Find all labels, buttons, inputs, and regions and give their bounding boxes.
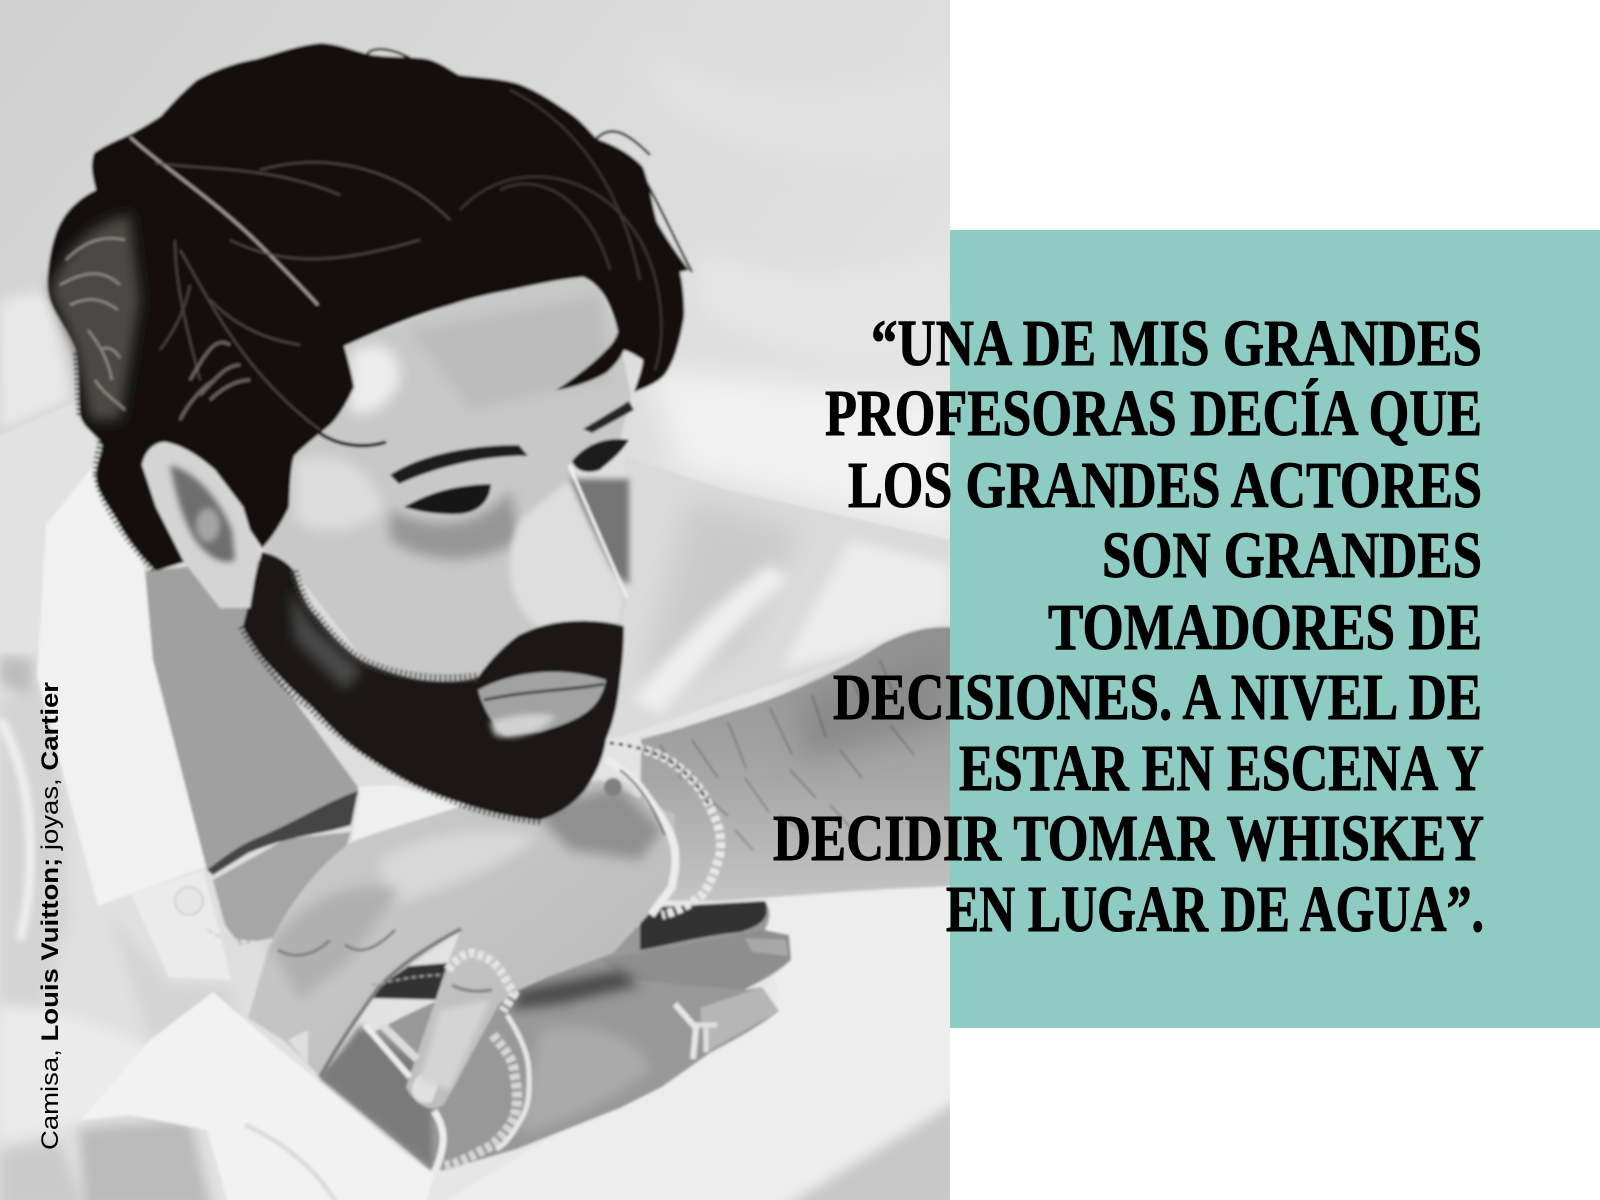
quote text: SON GRANDES <box>1102 519 1482 592</box>
quote text: TOMADORES DE <box>1048 591 1482 664</box>
jewellery: necklace <box>207 929 272 942</box>
table surface <box>430 886 960 1200</box>
teal quote panel <box>950 230 1600 1028</box>
beard <box>243 552 624 820</box>
jewellery: upper bracelets <box>604 743 721 915</box>
photo backdrop: water <box>0 0 960 1200</box>
hair <box>47 43 692 571</box>
jewellery: finger ring <box>448 953 514 1011</box>
quote text <box>773 307 1484 946</box>
lower hand <box>320 901 791 1170</box>
neck and chest <box>145 560 470 945</box>
shirt cuff <box>81 992 434 1200</box>
forearm with arm hair <box>640 627 960 901</box>
jewellery: lower bracelets <box>365 975 529 1173</box>
face <box>262 274 635 682</box>
shirt: torso and collar <box>0 401 240 1200</box>
ear <box>166 446 259 610</box>
vertical photo credit: Camisa, Louis Vuitton; joyas, Cartier <box>37 681 64 1150</box>
table front edge <box>789 1102 950 1200</box>
shirt button <box>175 887 203 915</box>
jewellery: ring on little finger <box>675 1004 717 1059</box>
upper hand and wrist <box>248 780 675 1108</box>
photo: man resting on his arms <box>0 0 960 1200</box>
shirt: sleeve <box>610 456 950 740</box>
